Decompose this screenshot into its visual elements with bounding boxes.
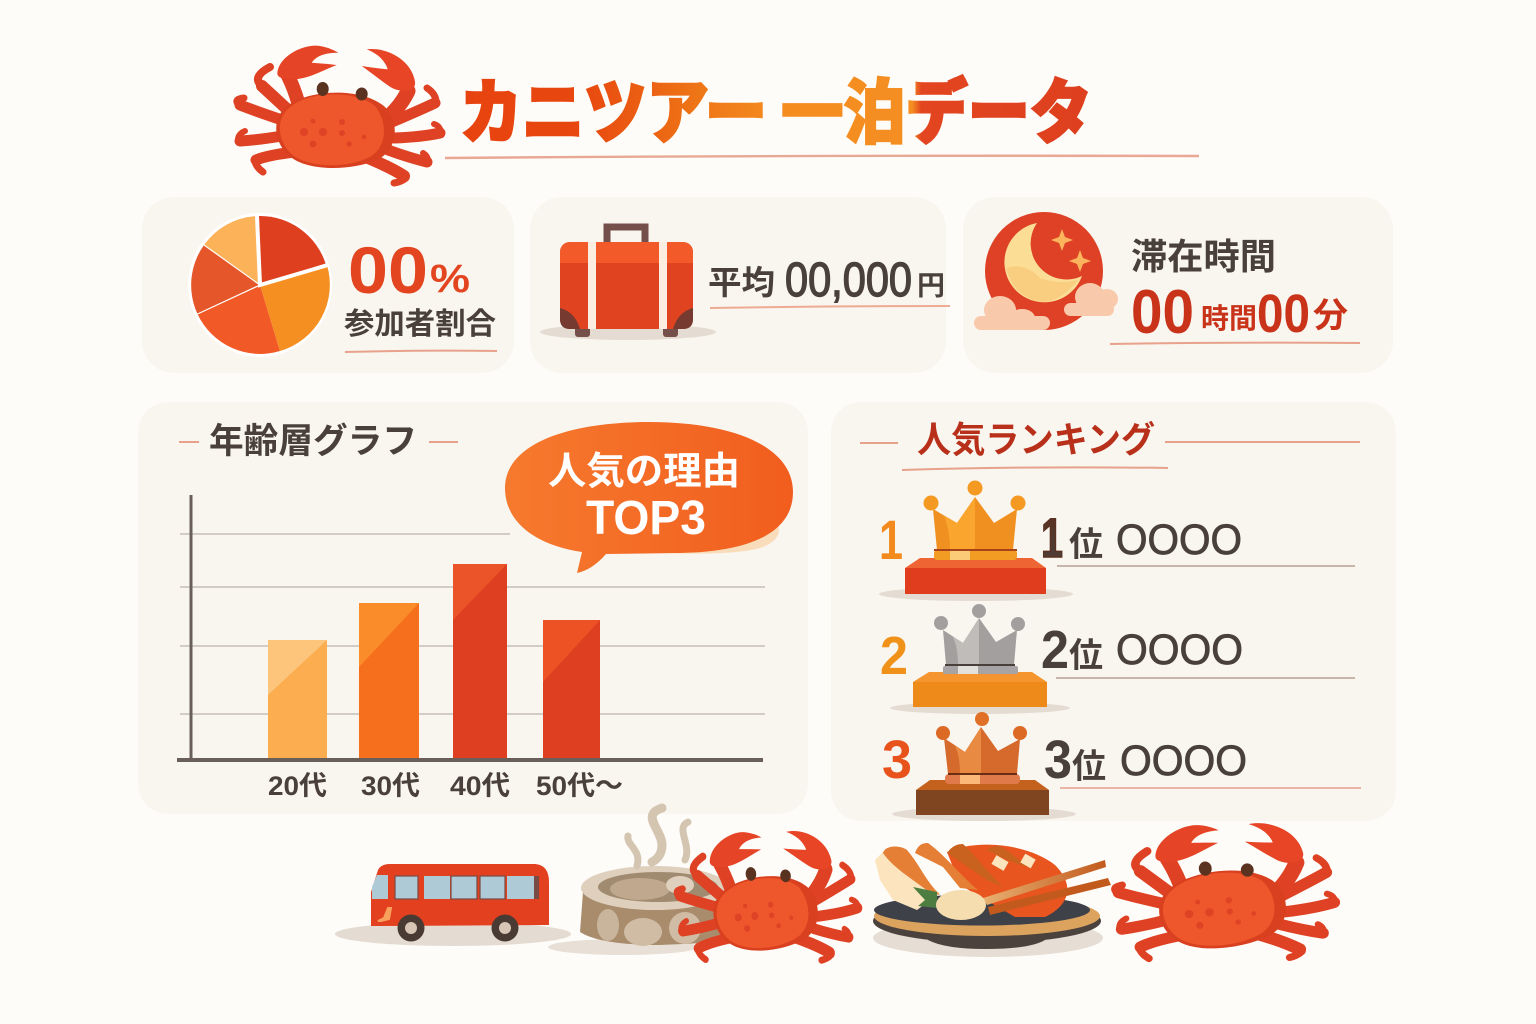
stay value bbox=[1131, 278, 1348, 347]
rank 2 label bbox=[1041, 620, 1355, 680]
rank 3 label: 3 bbox=[1044, 730, 1072, 790]
rank 1: 1 bbox=[879, 508, 903, 571]
stay label: 滞在時間 bbox=[1131, 236, 1276, 277]
rank 1 label bbox=[1041, 506, 1355, 569]
percentage value bbox=[348, 233, 470, 307]
bar: 20代 bbox=[268, 640, 327, 758]
icon: pie chart bbox=[188, 213, 332, 357]
rank 2 bbox=[880, 604, 1355, 714]
icon: header crab bbox=[237, 46, 441, 183]
rank 1 label: 位 bbox=[1069, 526, 1103, 564]
icon: large crab bbox=[1110, 814, 1340, 972]
percentage value: % bbox=[430, 257, 470, 301]
bar: 30代 bbox=[359, 603, 419, 758]
average cost text bbox=[708, 254, 945, 307]
bar: 40代 bbox=[453, 564, 507, 758]
average cost text: 平均 bbox=[708, 264, 775, 301]
axis labels: 30代 bbox=[361, 771, 420, 801]
rank 3 label: OOOO bbox=[1120, 737, 1247, 785]
rank 3 label: 位 bbox=[1072, 748, 1106, 786]
axis labels bbox=[268, 771, 623, 801]
icon: silver crown on podium bbox=[890, 604, 1070, 714]
panel: stay duration bbox=[963, 197, 1393, 373]
stay value: 00 bbox=[1257, 284, 1310, 344]
title: カニツアー 一泊データ bbox=[460, 57, 1092, 158]
icon: bus bbox=[335, 864, 571, 946]
rank 3: 3 bbox=[882, 730, 912, 790]
rank 1 label: OOOO bbox=[1116, 516, 1242, 564]
callout: reasons top 3: TOP3 bbox=[586, 492, 706, 545]
icon: bronze crown on podium bbox=[892, 712, 1076, 821]
rank 3 bbox=[882, 712, 1361, 821]
callout: reasons top 3: 人気の理由 bbox=[548, 451, 740, 493]
percentage value: 00 bbox=[348, 233, 428, 307]
average cost text: 円 bbox=[917, 271, 945, 301]
rank 1 bbox=[879, 480, 1355, 601]
stay value: 分 bbox=[1313, 297, 1348, 335]
ranking heading: 人気ランキング bbox=[917, 419, 1155, 460]
stay value: 00 bbox=[1131, 278, 1194, 347]
bar: 50代 bbox=[543, 620, 600, 758]
rank 3 label bbox=[1044, 730, 1361, 790]
axis labels: 40代 bbox=[450, 771, 510, 801]
callout: reasons top 3 bbox=[505, 422, 793, 573]
rank 2 label: 位 bbox=[1069, 637, 1103, 675]
icon: seafood plate bbox=[873, 843, 1111, 957]
rank 1 label: 1 bbox=[1041, 506, 1063, 569]
stay value: 時間 bbox=[1201, 303, 1257, 334]
panel: popularity ranking bbox=[831, 402, 1396, 821]
icon: moon and clouds bbox=[974, 212, 1118, 330]
bar chart bbox=[177, 495, 765, 801]
icon: suitcase bbox=[540, 227, 716, 340]
panel: average cost bbox=[530, 197, 950, 373]
rank 2: 2 bbox=[880, 626, 908, 686]
rank 2 label: OOOO bbox=[1116, 626, 1243, 674]
icon: hot spring bbox=[548, 808, 729, 955]
rank 2 label: 2 bbox=[1041, 620, 1069, 680]
average cost text: 00,000 bbox=[785, 254, 912, 307]
panel: age chart bbox=[138, 402, 808, 814]
panel: participation rate bbox=[142, 197, 514, 373]
axis labels: 20代 bbox=[268, 771, 327, 801]
participation label: 参加者割合 bbox=[344, 308, 496, 341]
axis labels: 50代～ bbox=[536, 771, 623, 801]
icon: gold crown on podium bbox=[879, 480, 1073, 601]
chart heading: 年齢層グラフ bbox=[209, 422, 417, 461]
icon: small crab bbox=[672, 823, 863, 972]
